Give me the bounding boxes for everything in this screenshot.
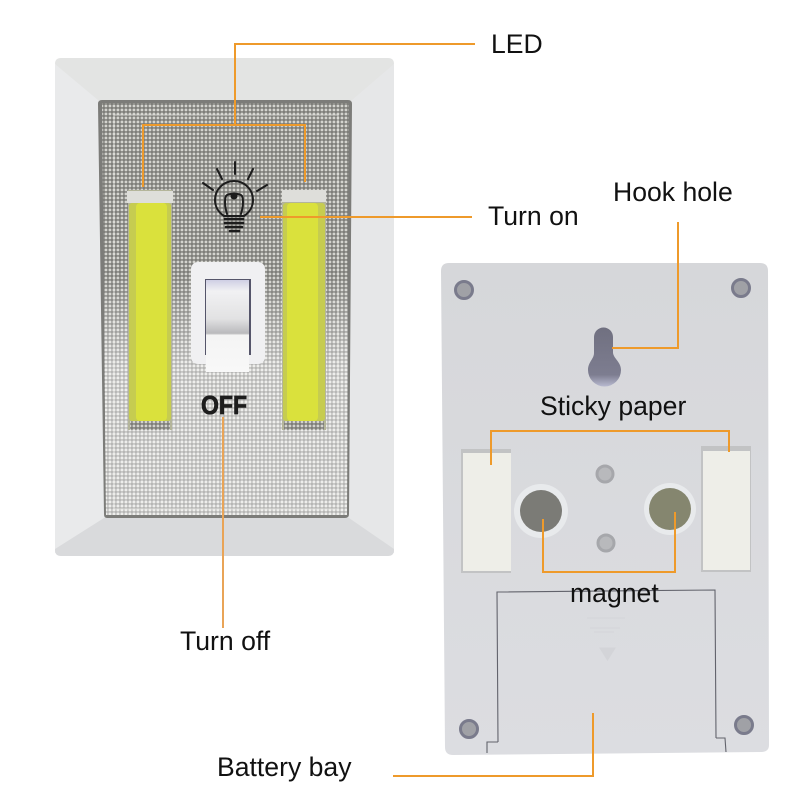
label: Turn off: Turn off [180, 626, 271, 656]
switch rocker [206, 280, 249, 372]
line: LED [143, 44, 475, 187]
right sticky pad [701, 446, 751, 572]
line: turn on [260, 216, 472, 218]
keyhole hook hole [588, 328, 621, 387]
label: Hook hole: Hook hole [613, 177, 733, 207]
left LED strip [127, 190, 173, 430]
OFF label: OFF [201, 390, 247, 420]
panel: back of light switch [441, 263, 769, 755]
screws [456, 280, 752, 738]
left sticky pad [461, 449, 511, 573]
battery bay cover [487, 590, 726, 753]
arrow mark on cover [587, 618, 625, 660]
back plate [441, 263, 769, 755]
line: turn off [222, 417, 224, 628]
line: battery bay [393, 713, 593, 776]
icon: light bulb [203, 162, 267, 231]
left magnet [514, 484, 568, 538]
line: magnet [543, 512, 675, 572]
right LED strip [282, 190, 326, 430]
panel: front of light switch [55, 58, 394, 556]
label: Battery bay: Battery bay [217, 752, 352, 782]
switch surround [191, 262, 265, 372]
frame [55, 58, 394, 556]
label: magnet: magnet [570, 578, 659, 608]
callout lines [143, 44, 729, 776]
dotted light panel [98, 100, 352, 518]
line: sticky paper [491, 431, 729, 465]
label: Sticky paper: Sticky paper [540, 391, 686, 421]
right magnet [644, 483, 696, 535]
line: hook hole [612, 222, 678, 348]
label: LED: LED [491, 29, 543, 59]
label: Turn on: Turn on [488, 201, 579, 231]
